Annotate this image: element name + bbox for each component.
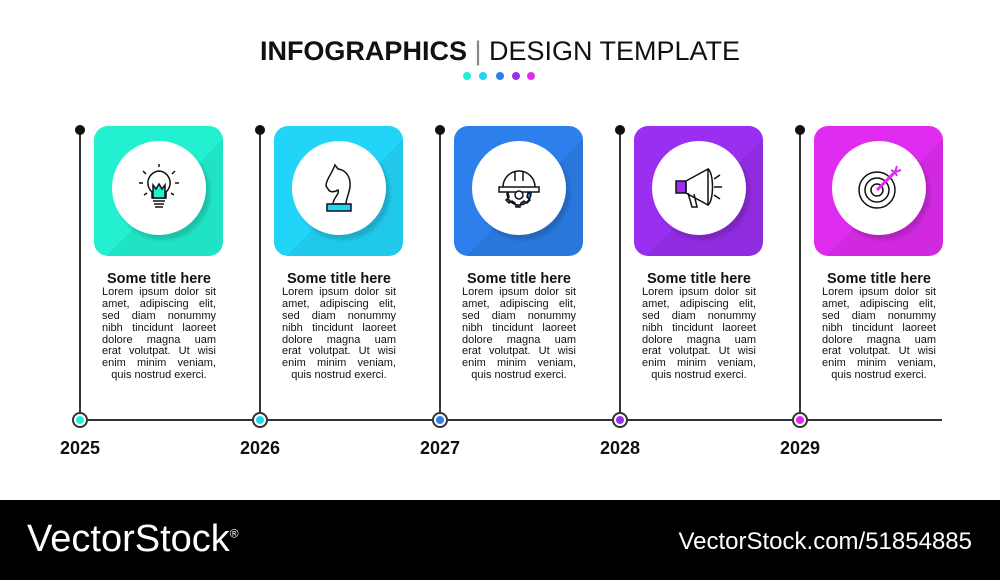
step 3: 2027 [420,438,460,458]
icon: megaphone [634,126,763,256]
step 3: Lorem ipsum dolor sit [462,286,576,298]
step 2 [240,125,403,458]
step 2: sed diam nonummy [282,310,396,322]
step 3: enim minim veniam, [462,357,576,369]
step 2: 2026 [240,438,280,458]
step 4: sed diam nonummy [642,310,756,322]
step 1: quis nostrud exerci. [111,369,207,381]
step 5: 2029 [780,438,820,458]
step 4: Some title here [647,271,751,287]
timeline axis [80,419,942,421]
step 5: Lorem ipsum dolor sit [822,286,936,298]
footer bar [0,500,1000,580]
step 4: nibh tincidunt laoreet [642,322,756,334]
icon: helmet gear [454,126,583,256]
step 5: Some title here [827,271,931,287]
step 4 [600,125,763,458]
step 1: amet, adipiscing elit, [102,298,216,310]
step 5: enim minim veniam, [822,357,936,369]
step 3: erat volutpat. Ut wisi [462,345,576,357]
icon: chess knight [274,126,403,256]
step 2: erat volutpat. Ut wisi [282,345,396,357]
step 5: dolore magna uam [822,334,936,346]
step 4: erat volutpat. Ut wisi [642,345,756,357]
step 1: erat volutpat. Ut wisi [102,345,216,357]
step 1: sed diam nonummy [102,310,216,322]
step 1: enim minim veniam, [102,357,216,369]
step 4: enim minim veniam, [642,357,756,369]
step 3 [420,125,583,458]
step 2: Lorem ipsum dolor sit [282,286,396,298]
icon: lightbulb [94,126,223,256]
step 4: quis nostrud exerci. [651,369,747,381]
footer brand: VectorStock® [27,518,239,560]
step 5: erat volutpat. Ut wisi [822,345,936,357]
step 3: quis nostrud exerci. [471,369,567,381]
step 4: 2028 [600,438,640,458]
step 2: amet, adipiscing elit, [282,298,396,310]
step 3: nibh tincidunt laoreet [462,322,576,334]
step 5: quis nostrud exerci. [831,369,927,381]
step 5: nibh tincidunt laoreet [822,322,936,334]
title: INFOGRAPHICS | DESIGN TEMPLATE [260,36,740,66]
step 2: dolore magna uam [282,334,396,346]
step 2: Some title here [287,271,391,287]
footer url: VectorStock.com/51854885 [678,528,972,555]
step 4: amet, adipiscing elit, [642,298,756,310]
title dots [463,72,535,80]
step 2: quis nostrud exerci. [291,369,387,381]
step 1: 2025 [60,438,100,458]
step 5 [780,125,943,458]
step 2: enim minim veniam, [282,357,396,369]
step 1: dolore magna uam [102,334,216,346]
step 1: Some title here [107,271,211,287]
step 5: amet, adipiscing elit, [822,298,936,310]
step 1 [60,125,223,458]
step 4: Lorem ipsum dolor sit [642,286,756,298]
step 5: sed diam nonummy [822,310,936,322]
icon: target [814,126,943,256]
step 1: nibh tincidunt laoreet [102,322,216,334]
step 1: Lorem ipsum dolor sit [102,286,216,298]
step 3: Some title here [467,271,571,287]
step 3: dolore magna uam [462,334,576,346]
step 4: dolore magna uam [642,334,756,346]
step 2: nibh tincidunt laoreet [282,322,396,334]
step 3: amet, adipiscing elit, [462,298,576,310]
step 3: sed diam nonummy [462,310,576,322]
